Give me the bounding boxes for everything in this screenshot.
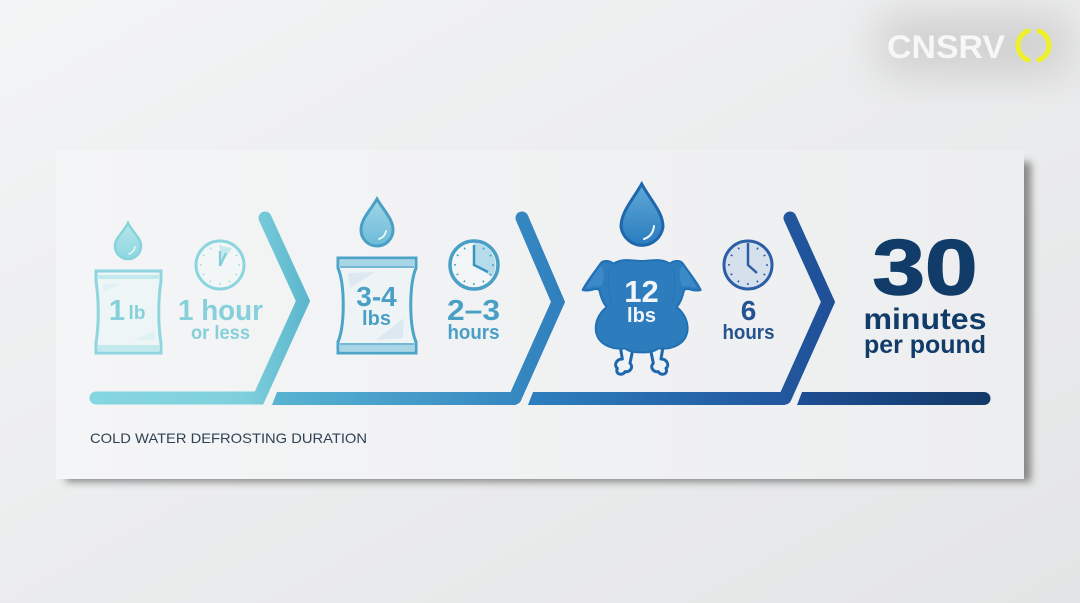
logo: CNSRV xyxy=(887,29,1049,65)
caption: COLD WATER DEFROSTING DURATION xyxy=(90,430,367,446)
icon: whole chicken 12 lbs xyxy=(583,260,701,374)
label: 1 lb: lb xyxy=(129,303,145,324)
label: 1 lb: 1 xyxy=(109,295,125,327)
text: 30 minutes per pound: minutes xyxy=(864,303,986,336)
arrow: step 3 chevron xyxy=(785,218,828,398)
icon: chicken legs xyxy=(616,345,668,374)
arrow: final bar xyxy=(797,392,991,405)
icon: water drop 2 xyxy=(361,199,393,246)
text: 2-3 hours: hours xyxy=(448,322,500,344)
text: 6 hours: 6 xyxy=(741,295,756,326)
icon: food bag 1 lb xyxy=(96,271,161,353)
arrow: step 3 bar xyxy=(528,392,785,405)
arrow: step 2 bar xyxy=(272,392,516,405)
text: 2-3 hours xyxy=(447,295,500,344)
label: 3-4 lbs: 3-4 xyxy=(356,281,397,312)
icon: clock 6 hours xyxy=(724,241,772,289)
text: 1 hour or less: 1 hour xyxy=(178,295,263,327)
arrow: step 2 chevron xyxy=(515,218,558,398)
text: 6 hours: hours xyxy=(722,322,774,344)
label: 3-4 lbs xyxy=(356,281,397,330)
text: 1 hour or less: or less xyxy=(191,323,250,344)
icon: clock 2-3 hours xyxy=(450,241,498,289)
text: 30 minutes per pound xyxy=(864,223,986,359)
icon: yellow ring xyxy=(1018,31,1049,60)
icon: chicken body xyxy=(583,260,701,352)
logo: CNSRV: CNSRV xyxy=(887,29,1006,65)
text: 30 minutes per pound: per pound xyxy=(864,331,986,359)
text: 1 hour or less xyxy=(178,295,263,344)
icon: food bag 3-4 lbs xyxy=(338,258,416,353)
arrow: step 1 chevron and bar xyxy=(96,218,303,398)
text: 30 minutes per pound: 30 xyxy=(872,223,978,311)
icon: clock 1 hour xyxy=(196,241,244,289)
label: 12 lbs xyxy=(624,274,659,327)
label: 1 lb xyxy=(109,295,145,327)
panel: infographic card xyxy=(56,150,1031,482)
text: 6 hours xyxy=(722,295,774,344)
icon: water drop 1 xyxy=(115,223,141,259)
label: 12 lbs: 12 xyxy=(624,274,659,309)
icon: water drop 3 xyxy=(621,184,663,245)
label: 3-4 lbs: lbs xyxy=(362,308,391,330)
label: 12 lbs: lbs xyxy=(627,305,656,327)
text: 2-3 hours: 2–3 xyxy=(447,295,500,327)
